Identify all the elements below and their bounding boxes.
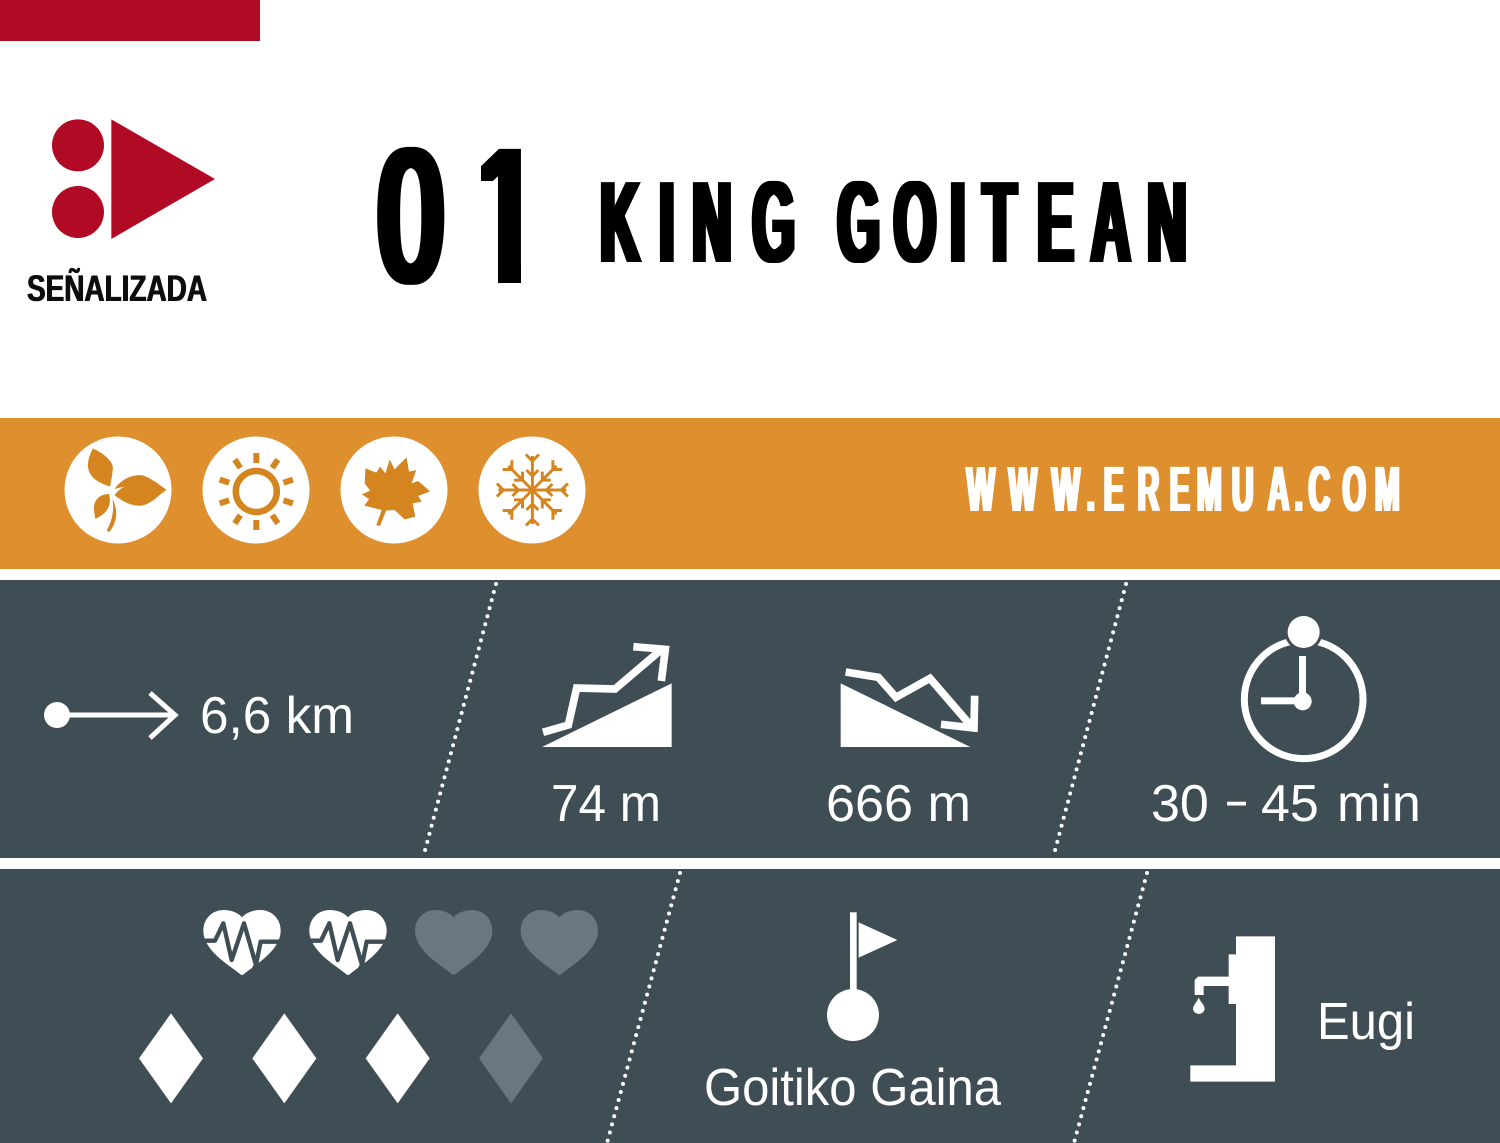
panel: seasons band	[0, 418, 1500, 569]
website address: WWW.EREMUA.COM	[967, 453, 1400, 525]
icon: winter snowflake	[478, 436, 586, 544]
icon: summer sun	[202, 436, 310, 544]
icon: water fountain	[1190, 936, 1275, 1082]
icon: active heart 1	[203, 910, 281, 975]
icon: distance arrow	[44, 693, 175, 738]
ascent	[542, 647, 672, 833]
distance	[44, 687, 354, 745]
route number: 01	[375, 108, 543, 325]
route title: KING GOITEAN	[600, 158, 1187, 288]
duration value: 45	[1261, 775, 1319, 833]
icon: descent slope	[841, 672, 975, 747]
start name: Goitiko Gaina	[704, 1059, 1001, 1117]
descent value: 666 m	[826, 775, 971, 833]
end name: Eugi	[1317, 993, 1415, 1051]
duration value: –	[1226, 781, 1247, 823]
panel: difficulty and start/end	[0, 869, 1500, 1143]
icon: active heart 2	[309, 910, 387, 975]
duration	[1151, 613, 1421, 833]
panel: route statistics	[0, 580, 1500, 858]
descent	[826, 672, 975, 833]
icon: ascent slope	[542, 647, 672, 747]
end point	[1190, 936, 1415, 1082]
ascent value: 74 m	[551, 775, 661, 833]
icon: stopwatch	[1244, 613, 1363, 759]
duration value: 30	[1151, 775, 1209, 833]
icon: inactive heart 3	[415, 910, 492, 975]
duration value: min	[1337, 775, 1421, 833]
logo mark	[52, 119, 215, 239]
icon: inactive heart 4	[521, 910, 598, 975]
icon: autumn maple leaf	[340, 436, 448, 544]
red top tab	[0, 0, 260, 41]
start point	[704, 912, 1001, 1117]
icon: flag marker	[827, 912, 897, 1041]
technical difficulty diamonds	[139, 1013, 543, 1103]
logo label: SEÑALIZADA	[27, 267, 207, 309]
icon: spring leaves	[64, 436, 172, 544]
distance value: 6,6 km	[200, 687, 354, 745]
logo: signposted route	[27, 119, 215, 309]
physical effort hearts	[203, 910, 598, 975]
